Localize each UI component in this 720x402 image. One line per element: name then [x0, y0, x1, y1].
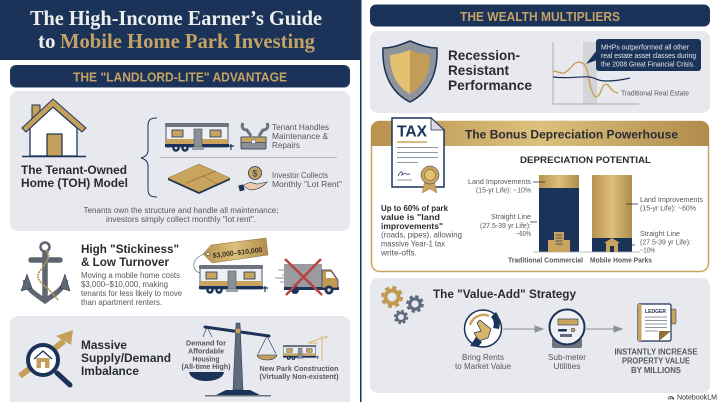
text: new park construction: New Park Construction: [260, 364, 339, 373]
text: tenant handles maintenance: Maintenance &: [272, 132, 329, 141]
text: stickiness body: than apartment renters.: [81, 298, 162, 307]
title: Mobile Home Park Investing: [60, 29, 315, 53]
text: investor collects: Monthly "Lot Rent": [272, 180, 342, 189]
heading: landlord-lite advantage: THE "LANDLORD-LITE" ADVANTAGE: [73, 70, 287, 84]
labels: traditional commercial: (15-yr Life): ~10%: [476, 186, 531, 194]
labels: traditional commercial: Straight Line: [491, 212, 531, 221]
icon: hand with coin: [238, 166, 267, 191]
labels: mobile home parks: (27.5-39 yr Life):: [640, 238, 691, 246]
arrow: [586, 326, 622, 332]
text: instantly increase property value: [614, 348, 698, 375]
text: stickiness body: $3,000–$10,000, making: [81, 280, 168, 289]
bar: mobile home parks: [592, 175, 632, 252]
icon: office building: [548, 232, 570, 252]
text: panel caption: [84, 206, 278, 224]
text: demand label: [182, 338, 231, 371]
text: tenant handles maintenance: Tenant Handles: [272, 123, 329, 132]
title: The High-Income Earner’s Guide: [30, 6, 322, 30]
icon: mobile home: [165, 123, 234, 152]
icon: shield: [383, 41, 437, 102]
icon: mobile home with crane: [283, 336, 328, 361]
text: value-add heading: The "Value-Add" Strategy: [433, 287, 576, 301]
panel: stickiness: [21, 238, 339, 307]
text: traditional real estate: Traditional Real Estate: [621, 88, 689, 98]
icon: small house: [604, 238, 620, 252]
panel: supply demand: [10, 316, 350, 402]
icon: mobile home: [199, 265, 268, 294]
labels: traditional commercial: Land Improvements: [468, 177, 531, 186]
arrow: [503, 326, 543, 332]
labels: mobile home parks: [640, 195, 703, 254]
panel: bonus depreciation: [371, 118, 709, 272]
text: recession heading: [448, 47, 532, 93]
icon: lot: [168, 164, 230, 194]
icon: gears: [382, 287, 423, 323]
title: [0, 0, 360, 60]
text: stickiness body: tenants for less likely to move: [81, 289, 183, 298]
title: to: [38, 29, 56, 53]
icon: tax document: [392, 118, 444, 193]
icon: utility meter: [550, 310, 584, 348]
heading: wealth multipliers: [370, 4, 710, 26]
text: up to 60%: (roads, pipes), allowing: [381, 230, 462, 240]
icon: magnifier with arrow: [20, 330, 73, 385]
labels: traditional commercial: ~60%: [516, 229, 531, 238]
column divider: [360, 0, 362, 402]
text: bring rents: Bring Rents: [462, 353, 504, 362]
text: recession heading: Resistant: [448, 62, 509, 78]
panel: tenant-owned home model: [10, 91, 350, 231]
text: supply demand heading: Massive: [81, 338, 127, 352]
text: sub-meter utilities: [548, 353, 586, 371]
labels: mobile home parks: Land Improvements: [640, 195, 703, 204]
text: sub-meter utilities: Sub-meter: [548, 353, 586, 362]
callout: MHPs outperformed: the 2008 Great Financial Crisis.: [601, 62, 695, 68]
text: demand label: Demand for: [186, 338, 226, 348]
labels: traditional commercial: [468, 177, 531, 238]
logo: NotebookLM: NotebookLM: [677, 392, 717, 402]
text: recession heading: Recession-: [448, 47, 520, 63]
icon: tools: [241, 123, 268, 149]
heading bar: The Bonus Depreciation Powerhouse: [465, 128, 678, 142]
labels: mobile home parks: ~10%: [640, 246, 655, 254]
callout: MHPs outperformed: MHPs outperformed all other: [601, 44, 690, 52]
text: up to 60%: write-offs.: [380, 248, 417, 258]
labels: mobile home parks: (15-yr Life): ~60%: [640, 204, 696, 212]
icon: hand with coin: $: [252, 168, 258, 178]
axis labels: Traditional Commercial: [508, 256, 583, 264]
icon: crossed truck: [275, 259, 339, 295]
text: panel caption: investors simply collect monthly "lot rent".: [106, 215, 256, 224]
text: supply demand heading: Imbalance: [81, 364, 139, 378]
text: up to 60%: Up to 60% of park: [381, 204, 449, 213]
text: up to 60%: massive Year-1 tax: [381, 240, 445, 248]
text: instantly increase property value: INSTANTLY INCREASE: [614, 348, 698, 356]
text: demand label: Affordable: [188, 346, 224, 356]
line chart: [553, 42, 639, 104]
heading: wealth multipliers: THE WEALTH MULTIPLIERS: [460, 10, 620, 24]
chart title: DEPRECIATION POTENTIAL: [520, 155, 651, 166]
text: panel caption: Tenants own the structure and handle all maintenance;: [84, 206, 278, 215]
brace: [141, 118, 157, 197]
icon: tax document: TAX: [397, 124, 428, 140]
text: up to 60%: [380, 204, 462, 258]
text: bring rents: [455, 353, 511, 371]
icon: ledger: LEDGER: [645, 309, 666, 315]
text: bring rents: to Market Value: [455, 362, 511, 371]
icon: price tag: $3,000–$10,000: [212, 247, 263, 260]
text: instantly increase property value: PROPERTY VALUE: [622, 356, 690, 366]
callout: MHPs outperformed: [586, 39, 701, 71]
bar: traditional commercial: [539, 175, 579, 252]
text: recession heading: Performance: [448, 77, 532, 93]
text: demand label: Housing: [192, 354, 220, 364]
icon: ledger: [638, 304, 676, 341]
text: tenant handles maintenance: Repairs: [272, 141, 300, 150]
labels: mobile home parks: Straight Line: [640, 229, 680, 238]
bar chart: depreciation: [530, 175, 640, 252]
text: up to 60%: improvements": [381, 222, 443, 231]
icon: gauge with hand: [464, 310, 502, 347]
text: stickiness heading: & Low Turnover: [81, 255, 169, 269]
panel: value-add: [370, 278, 710, 393]
icon: anchor: [21, 242, 70, 301]
heading: landlord-lite advantage: [10, 65, 350, 88]
icon: balance scale: [189, 323, 277, 396]
text: supply demand heading: [81, 338, 171, 378]
icon: price tag: [194, 238, 268, 273]
axis labels: [508, 256, 652, 264]
text: instantly increase property value: BY MILLIONS: [631, 366, 681, 375]
text: up to 60%: value is "land: [381, 213, 440, 222]
text: new park construction: (Virtually Non-existent): [260, 372, 339, 381]
text: new park construction: [260, 364, 339, 381]
labels: traditional commercial: (27.5-39 yr Life):: [480, 221, 531, 230]
axis labels: Mobile Home Parks: [590, 256, 652, 264]
text: demand label: (All-time High): [182, 362, 231, 371]
text: stickiness body: Moving a mobile home costs: [81, 271, 180, 280]
text: sub-meter utilities: Utilities: [554, 362, 581, 371]
panel: recession-resistant: [370, 31, 710, 113]
heading bar: [371, 121, 709, 146]
text: TOH model: Home (TOH) Model: [21, 178, 128, 190]
text: stickiness heading: [81, 242, 179, 269]
text: TOH model: [21, 165, 128, 190]
callout: MHPs outperformed: real estate asset classes during: [601, 53, 696, 60]
text: stickiness heading: High "Stickiness": [81, 242, 179, 256]
text: stickiness body: [81, 271, 183, 307]
text: TOH model: The Tenant-Owned: [21, 165, 127, 177]
text: investor collects: [272, 171, 342, 189]
text: investor collects: Investor Collects: [272, 171, 328, 180]
text: supply demand heading: Supply/Demand: [81, 351, 171, 365]
icon: house: [22, 99, 86, 156]
text: tenant handles maintenance: [272, 123, 329, 150]
